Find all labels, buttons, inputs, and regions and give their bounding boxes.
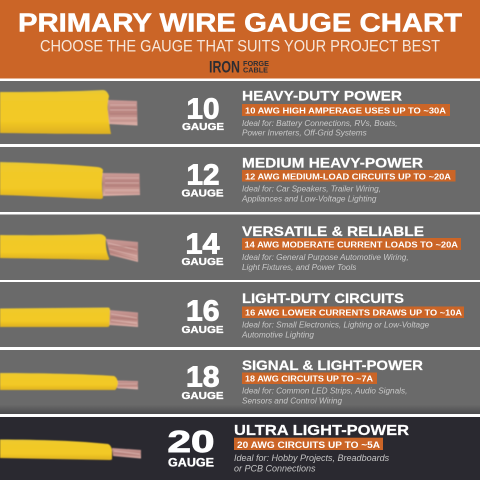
panel: 18 gauge [0,350,480,414]
wire: 14 gauge [0,234,138,262]
logo: Iron Forge Cable: CABLE [243,66,268,75]
info: 10 gauge: HEAVY-DUTY POWER [242,88,402,104]
wire: 10 gauge [0,90,138,134]
rating badge: 12 AWG MEDIUM-LOAD CIRCUITS UP TO ~20A [245,171,451,181]
gauge number: 16 [182,296,224,336]
gauge number: 18 [182,362,224,402]
gauge number: 20: GAUGE [168,458,214,470]
ideal-for description: Ideal for: General Purpose Automotive Wiring, [242,253,409,262]
wire: 20 gauge [0,440,141,460]
rating badge: 14 AWG MODERATE CURRENT LOADS TO ~20A [244,240,458,250]
logo: Iron Forge Cable: IRON [209,58,240,76]
info: 10 gauge [242,88,450,138]
rating badge: 16 AWG LOWER CURRENTS DRAWS UP TO ~10A [245,308,462,318]
info: 14 gauge [242,224,461,272]
panel: 10 gauge [0,81,480,144]
header banner [0,0,480,78]
gauge number: 12: GAUGE [182,188,224,200]
gauge number: 14: GAUGE [182,256,224,268]
gauge number: 20 [168,425,214,470]
gauge number: 16: 16 [186,296,220,328]
panel: 20 gauge [0,417,480,480]
ideal-for description: Ideal for: Common LED Strips, Audio Signals, [242,387,407,396]
gauge number: 14: 14 [186,229,220,261]
info: 16 gauge [241,291,464,340]
info: 18 gauge [242,358,423,406]
wire: 18 gauge [0,373,138,390]
wire: 12 gauge [0,162,140,199]
gauge number: 14 [182,229,224,268]
rating badge: 18 AWG CIRCUITS UP TO ~7A [245,374,373,384]
title: PRIMARY WIRE GAUGE CHART [18,10,462,38]
rating badge: 10 AWG HIGH AMPERAGE USES UP TO ~30A [245,105,446,115]
panel: 16 gauge [0,282,480,347]
gauge number: 10: 10 [186,94,220,126]
ideal-for description: Light Fixtures, and Power Tools [242,263,356,272]
gauge number: 12 [182,160,224,200]
ideal-for description: Power Inverters, Off-Grid Systems [242,128,367,138]
ideal-for description: or PCB Connections [234,464,316,474]
gauge number: 18: GAUGE [182,390,224,402]
info: 14 gauge: VERSATILE & RELIABLE [242,224,424,239]
gauge number: 20: 20 [168,425,214,459]
info: 20 gauge [234,422,409,474]
ideal-for description: Sensors and Control Wiring [242,397,342,406]
ideal-for description: Automotive Lighting [241,331,314,340]
ideal-for description: Ideal for: Small Electronics, Lighting or Low-Voltage [242,321,430,330]
logo: Iron Forge Cable: FORGE [243,59,269,68]
gauge number: 12: 12 [186,160,220,192]
rating badge: 20 AWG CIRCUITS UP TO ~5A [237,439,380,450]
wire: 16 gauge [0,308,138,327]
ideal-for description: Ideal for: Hobby Projects, Breadboards [234,453,390,463]
panel: 14 gauge [0,214,480,280]
gauge number: 18: 18 [186,362,220,394]
ideal-for description: Ideal for: Battery Connections, RVs, Boats, [242,119,398,128]
gauge number: 10 [182,94,224,133]
info: 18 gauge: SIGNAL & LIGHT-POWER [242,358,423,373]
ideal-for description: Appliances and Low-Voltage Lighting [241,195,377,204]
gauge number: 10: GAUGE [182,121,224,133]
info: 16 gauge: LIGHT-DUTY CIRCUITS [242,291,404,306]
panel: 12 gauge [0,147,480,212]
info: 20 gauge: ULTRA LIGHT-POWER [234,422,409,439]
info: 12 gauge [241,155,456,204]
gauge number: 16: GAUGE [182,324,224,336]
ideal-for description: Ideal for: Car Speakers, Trailer Wiring, [242,185,381,194]
info: 12 gauge: MEDIUM HEAVY-POWER [242,155,423,170]
